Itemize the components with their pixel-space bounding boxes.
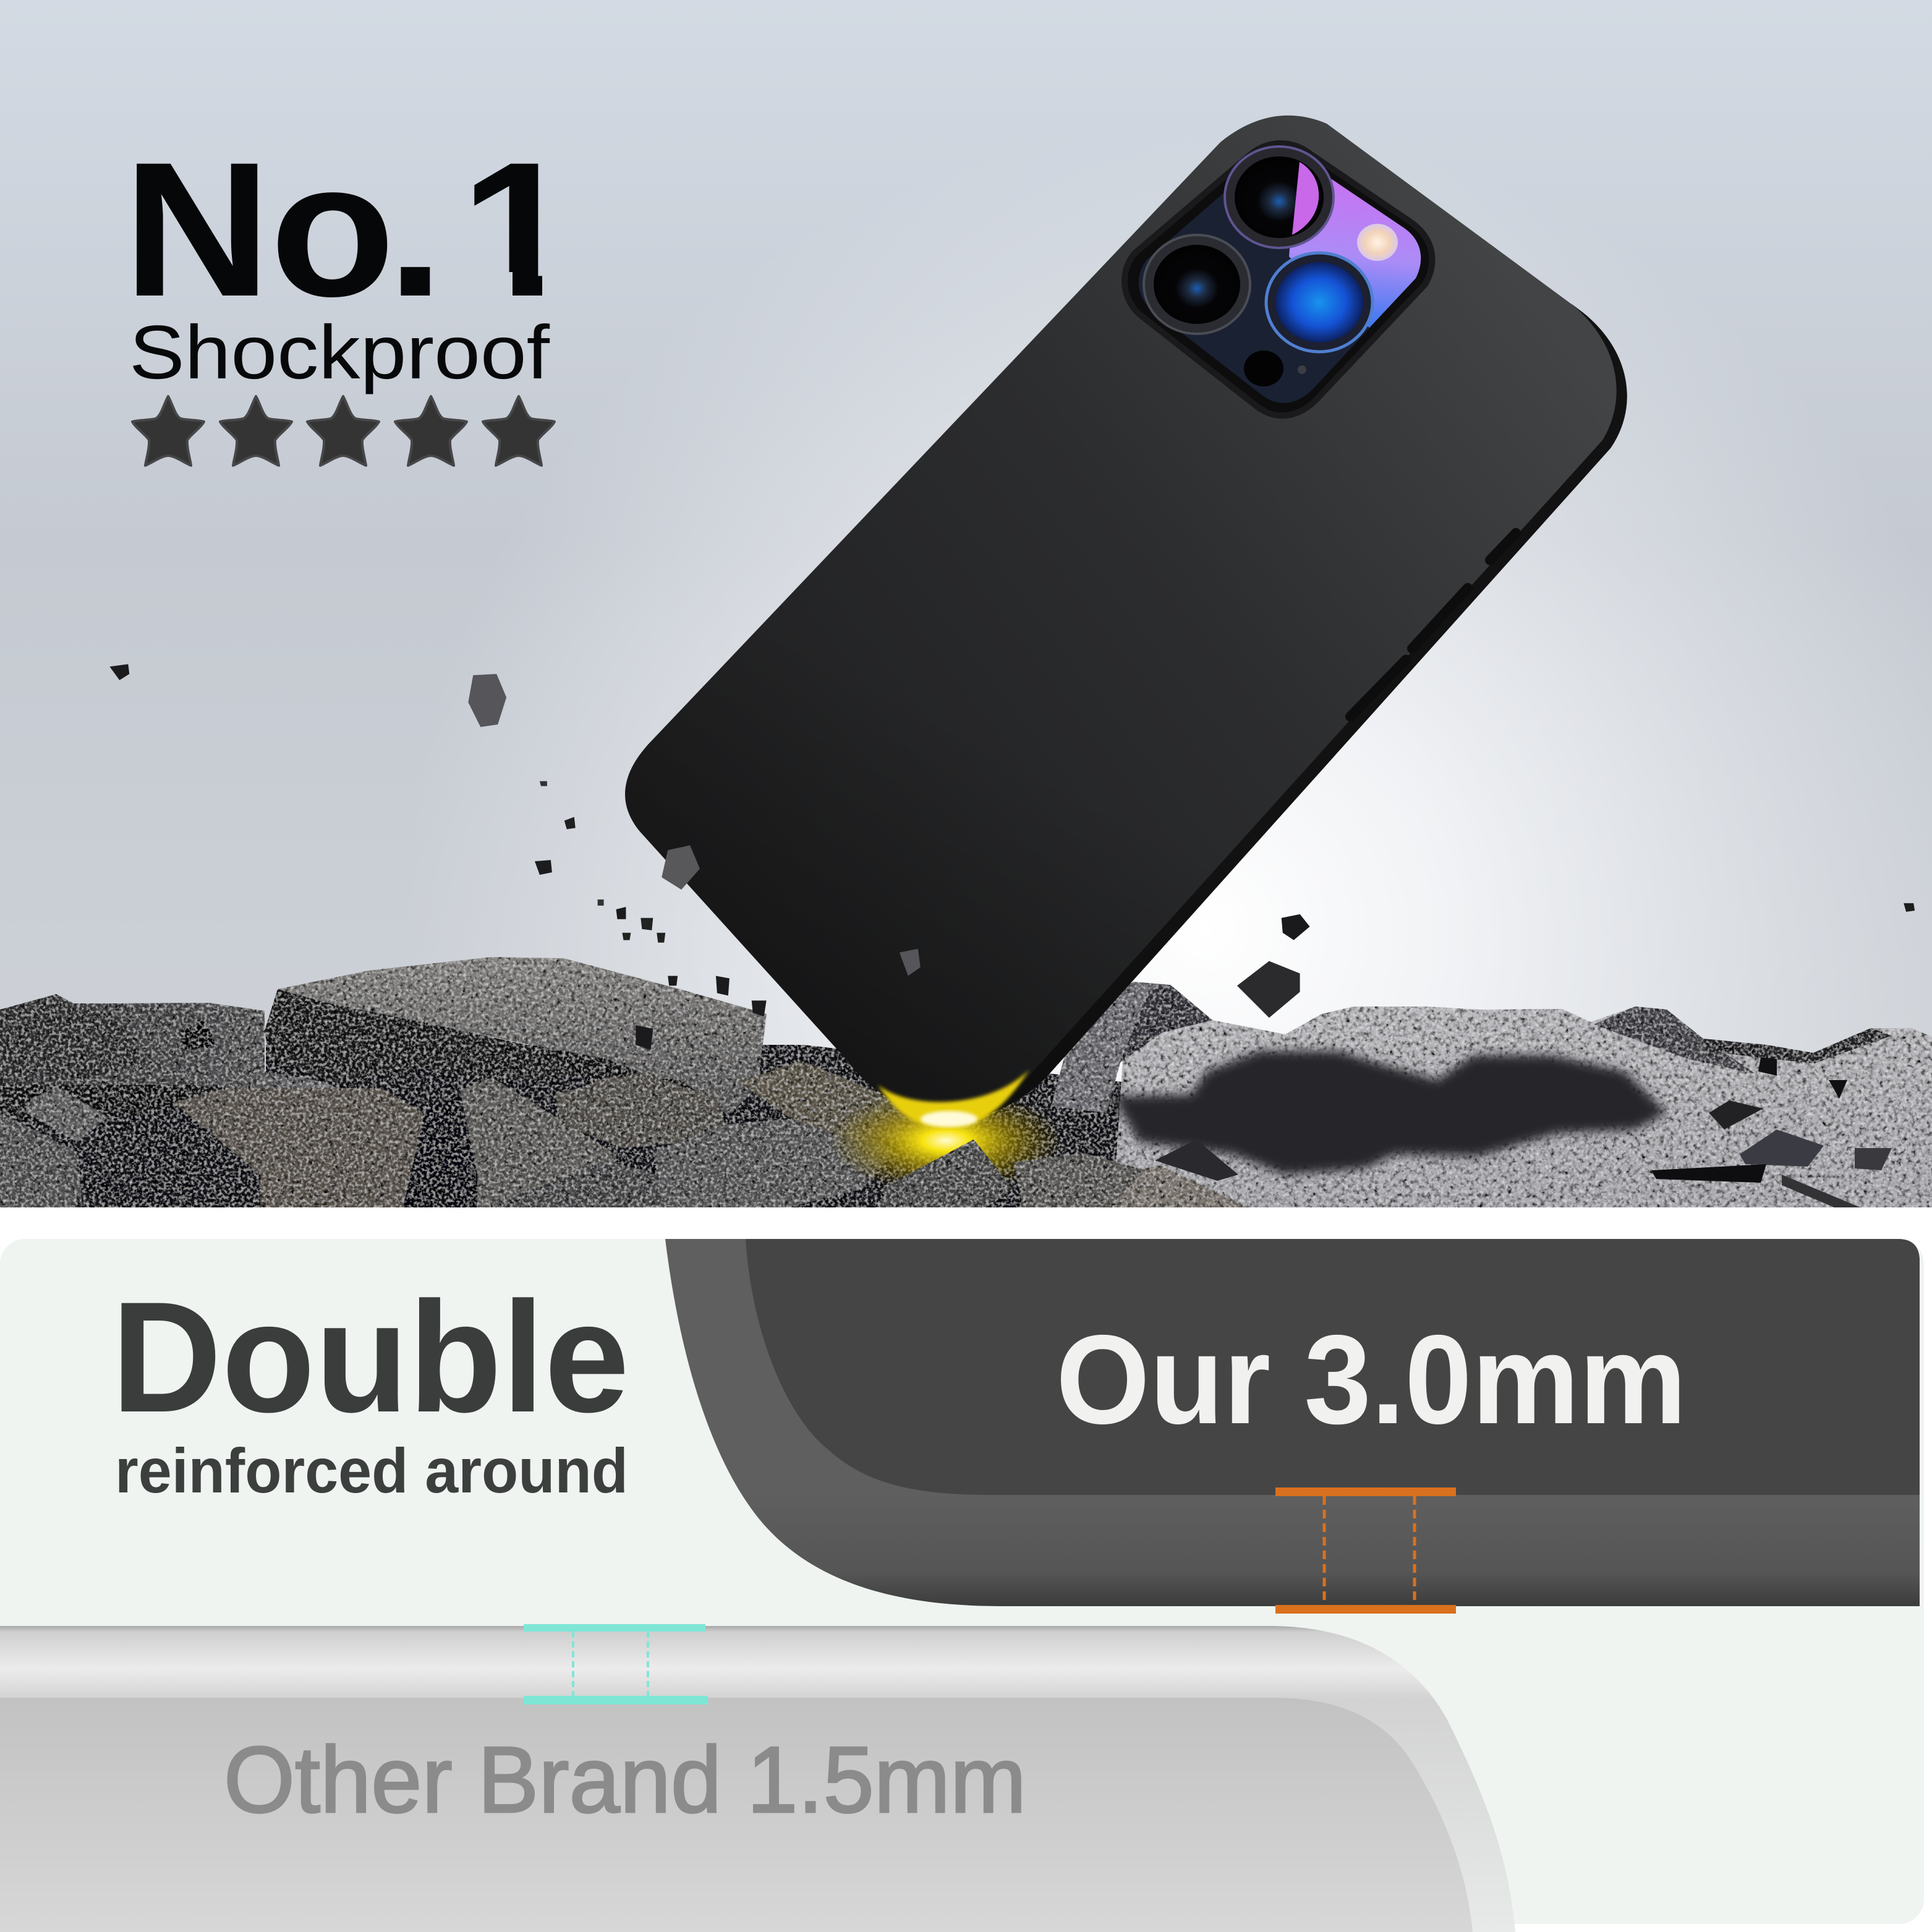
other brand: outer wall (0, 1626, 1515, 1932)
phone rim: right edge (964, 303, 1627, 1120)
phone body (625, 116, 1627, 1118)
five star rating (132, 396, 555, 466)
label: Our 3.0mm: Our 3.0mm (1056, 1309, 1687, 1450)
side buttons (1350, 533, 1516, 717)
flying debris (109, 664, 1915, 1050)
text: reinforced around: reinforced around (115, 1436, 628, 1506)
flash (1357, 224, 1398, 261)
phone: yellow crescent at impact corner (878, 1070, 1029, 1128)
camera bump outer frame (1125, 143, 1432, 415)
label: Other Brand 1.5mm: Other Brand 1.5mm (224, 1727, 1026, 1832)
yellow impact glow behind phone (828, 1088, 1063, 1193)
our case: inner cavity (746, 1239, 1920, 1495)
comparison panel (0, 1239, 1924, 1932)
orange thickness marker: 3.0mm (1275, 1487, 1456, 1614)
camera module (1125, 143, 1432, 415)
lidar (1244, 351, 1283, 386)
title: No.1: 1 (460, 122, 577, 337)
lens: right blue (1266, 253, 1372, 352)
mic (1298, 365, 1306, 374)
our case: outer wall (665, 1239, 1920, 1606)
white strip between photo and panel (0, 1207, 1932, 1239)
title: No.1 (137, 163, 542, 297)
panel background (0, 1239, 1924, 1924)
phone shading: lower darkening (625, 116, 1627, 1118)
camera glass plate (1139, 154, 1421, 403)
subtitle: Shockproof: Shockproof (129, 310, 550, 395)
lens: left (1144, 235, 1250, 334)
other brand: inner cavity (0, 1698, 1473, 1932)
rocks: ground rubble (0, 957, 1932, 1208)
teal thickness marker: 1.5mm (524, 1624, 708, 1704)
heading: Double: Double (111, 1269, 629, 1445)
glow hot spot (921, 1111, 977, 1127)
rocks: cast shadow (1113, 1051, 1667, 1175)
camera iridescent panel (1289, 156, 1421, 328)
title: No.1: No. (123, 122, 444, 337)
phone: black case (625, 116, 1627, 1128)
rocks: foreground over glow (881, 1139, 1146, 1207)
rocks: dark stones right (1155, 1057, 1892, 1207)
photo background: sky (0, 0, 1932, 1207)
lens: top (1225, 147, 1334, 248)
